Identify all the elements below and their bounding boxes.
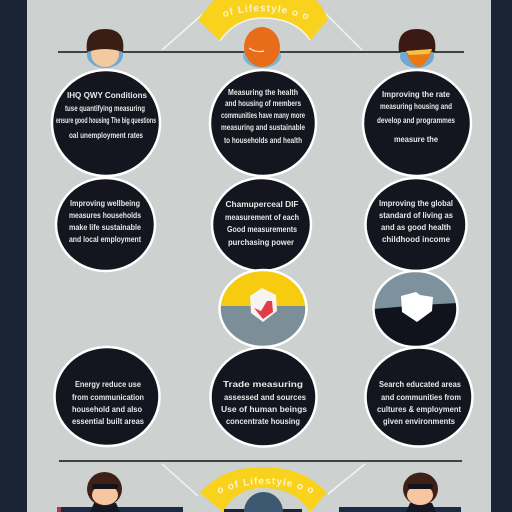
circle: row 4 center: assessed and sources bbox=[224, 393, 307, 402]
circle: row 2 right: childhood income bbox=[382, 235, 451, 244]
circle: row 4 right: cultures & employment bbox=[377, 405, 461, 414]
circle: row 4 left: Energy reduce use bbox=[75, 380, 142, 389]
right dark margin bbox=[491, 0, 512, 512]
circle: row 4 left: from communication bbox=[72, 393, 144, 402]
icon circle: yellow shield bbox=[219, 270, 307, 347]
left dark margin bbox=[0, 0, 27, 512]
circle: row 4 right bbox=[366, 348, 472, 446]
top rule bbox=[58, 51, 464, 53]
circle: row 1 right: Improving the rate bbox=[382, 90, 451, 99]
circle: row 4 right: given environments bbox=[383, 417, 456, 426]
circle: row 1 center: communities have many more bbox=[221, 111, 305, 120]
circle: row 4 center: concentrate housing bbox=[226, 417, 300, 426]
circle: row 1 center: and housing of members bbox=[225, 99, 301, 108]
circle: row 2 center: purchasing power bbox=[228, 238, 294, 247]
circle: row 4 center bbox=[210, 348, 316, 446]
circle: row 4 right: Search educated areas bbox=[379, 380, 462, 389]
bottom left figure bbox=[57, 472, 183, 512]
circle: row 1 right: measuring housing and bbox=[380, 102, 452, 111]
circle: row 4 left: essential built areas bbox=[72, 417, 145, 426]
bottom right figure bbox=[339, 472, 461, 512]
circle: row 1 left bbox=[52, 70, 160, 176]
circle: row 1 right bbox=[363, 70, 471, 176]
circle: row 2 right: and as good health bbox=[381, 223, 451, 232]
top banner bbox=[162, 0, 362, 50]
icon circle: dark shield bbox=[373, 271, 458, 347]
circle: row 4 center: Trade measuring bbox=[223, 380, 303, 389]
circle: row 2 center bbox=[212, 178, 311, 271]
bottom center figure bbox=[224, 492, 302, 512]
circle: row 1 center bbox=[210, 70, 316, 176]
circle: row 1 right: measure the bbox=[394, 135, 439, 144]
top left avatar bbox=[87, 29, 123, 68]
bottom banner bbox=[162, 464, 366, 512]
circle: row 2 left: Improving wellbeing bbox=[70, 199, 140, 208]
top center avatar bbox=[243, 27, 281, 68]
circle: row 2 left bbox=[56, 178, 155, 271]
banner title: of Lifestyle o o bbox=[223, 4, 308, 19]
circle: row 2 center: Chamuperceal DIF bbox=[226, 200, 299, 209]
circle: row 1 right: develop and programmes bbox=[377, 116, 455, 125]
circle: row 1 left: oal unemployment rates bbox=[69, 131, 143, 140]
circle: row 4 left: household and also bbox=[72, 405, 142, 414]
circle: row 1 center: to households and health bbox=[224, 136, 302, 145]
circle: row 2 right: standard of living as bbox=[379, 211, 454, 220]
circle: row 1 left: tuse quantifying measuring bbox=[65, 104, 145, 113]
circle: row 2 right bbox=[366, 178, 466, 271]
bottom rule bbox=[59, 460, 462, 462]
circle: row 2 center: Good measurements bbox=[227, 225, 297, 234]
circle: row 1 center: measuring and sustainable bbox=[221, 123, 305, 132]
circle: row 1 left: IHQ QWY Conditions bbox=[67, 91, 148, 100]
circle: row 4 right: and communities from bbox=[381, 393, 461, 402]
circle: row 2 right: Improving the global bbox=[379, 199, 453, 208]
banner title: o of Lifestyle o o bbox=[218, 477, 314, 494]
circle: row 1 center: Measuring the health bbox=[228, 88, 298, 97]
circle: row 2 left: and local employment bbox=[69, 235, 141, 244]
circle: row 2 center: measurement of each bbox=[225, 213, 299, 222]
circle: row 4 center: Use of human beings bbox=[221, 405, 308, 414]
top right avatar bbox=[399, 29, 435, 68]
circle: row 4 left bbox=[54, 347, 160, 446]
circle: row 2 left: make life sustainable bbox=[69, 223, 141, 232]
circle: row 1 left: ensure good housing The big questions bbox=[56, 116, 156, 125]
circle: row 2 left: measures households bbox=[69, 211, 141, 220]
